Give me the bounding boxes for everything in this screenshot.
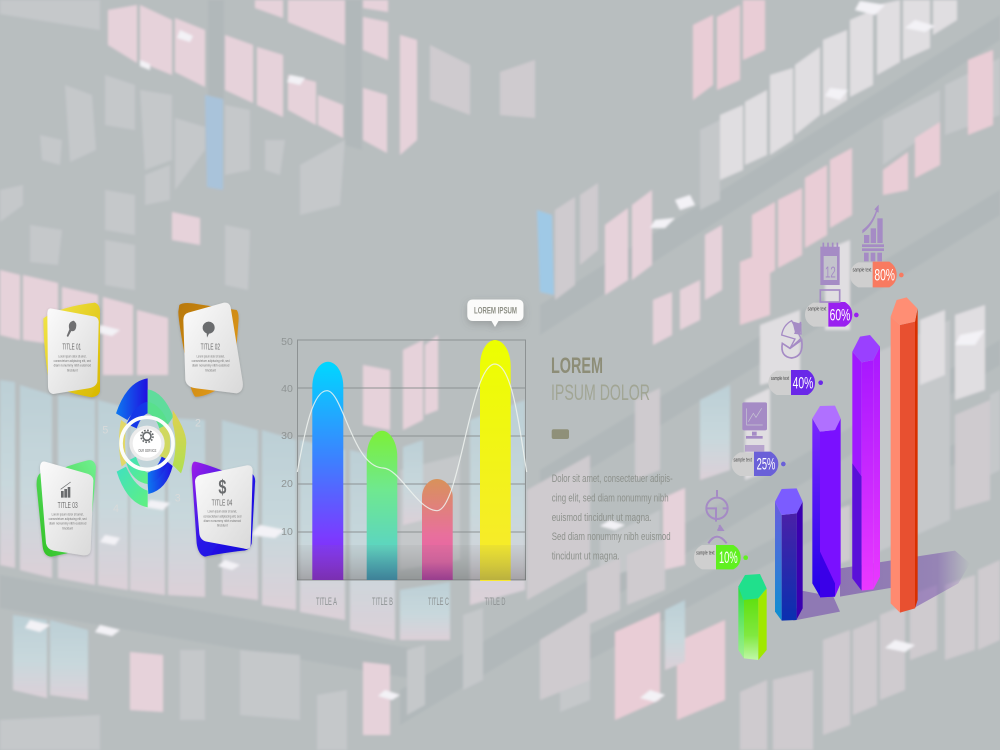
card: title 02: Lorem ipsum dolor sit amet, bbox=[197, 354, 225, 358]
label: 60%: sample text bbox=[808, 307, 827, 313]
icon: calendar bbox=[820, 243, 840, 302]
text block: heading and paragraph bbox=[551, 353, 673, 562]
card: title 01 bbox=[43, 303, 100, 397]
icon: calendar: 12 bbox=[825, 264, 836, 281]
category labels: TITLE D bbox=[484, 596, 506, 608]
platform shadow bbox=[793, 551, 970, 621]
label: 80%: 80% bbox=[874, 265, 895, 284]
card: title 03: tincidunt bbox=[62, 526, 73, 530]
bar: title A bbox=[312, 362, 343, 580]
chart: bar and line chart bbox=[281, 300, 527, 608]
floor shadow bbox=[297, 545, 526, 580]
segment numbers: 5 bbox=[102, 425, 108, 437]
card: title 01: Lorem ipsum dolor sit amet, bbox=[58, 354, 86, 358]
bar: title B bbox=[367, 431, 397, 580]
icon: pie chart bbox=[782, 321, 802, 358]
category labels: TITLE B bbox=[372, 596, 393, 608]
card: title 01: tincidunt bbox=[67, 368, 78, 372]
label: 40%: sample text bbox=[771, 376, 790, 382]
chart: 3D hexagonal bars bbox=[694, 205, 970, 660]
chart grid bbox=[297, 340, 526, 580]
bar: title C bbox=[422, 479, 453, 580]
callout: lorem ipsum bbox=[467, 300, 524, 327]
segment numbers: 4 bbox=[113, 503, 119, 515]
axis labels bbox=[281, 336, 293, 538]
bar: 40 percent bbox=[812, 406, 841, 597]
category labels: TITLE C bbox=[428, 596, 449, 608]
bar: 60 percent bbox=[852, 335, 880, 591]
label: 80%: sample text bbox=[853, 267, 872, 273]
heading bbox=[551, 353, 650, 405]
paragraph: Dolor sit amet, consectetuer adipis- bbox=[552, 473, 673, 485]
category labels bbox=[316, 596, 506, 608]
card: title 03: consectetuer adipiscing elit, sed bbox=[49, 517, 87, 521]
card: title 04 bbox=[192, 462, 255, 557]
card: title 02 bbox=[178, 303, 243, 397]
card: title 03 bbox=[37, 460, 96, 557]
paragraph: euismod tincidunt ut magna. bbox=[552, 512, 652, 524]
card: title 04: Lorem ipsum dolor sit amet, bbox=[208, 510, 237, 514]
bar: 10 percent bbox=[738, 574, 767, 660]
segment numbers: 3 bbox=[175, 492, 181, 504]
icon: clock bbox=[706, 490, 728, 543]
label: 80% bbox=[850, 262, 904, 287]
card: title 03: Lorem ipsum dolor sit amet, bbox=[52, 512, 84, 516]
label: 25% bbox=[732, 452, 786, 476]
card: title 04: tincidunt bbox=[217, 524, 228, 528]
card: title 03: diam nonummy nibh euismod bbox=[49, 522, 86, 526]
card: title 03: TITLE 03 bbox=[58, 500, 78, 510]
card: title 01: consectetuer adipiscing elit, sed bbox=[54, 359, 91, 363]
axis labels: 40 bbox=[281, 383, 293, 395]
label: 60% bbox=[805, 302, 859, 327]
label: 25%: sample text bbox=[733, 457, 752, 463]
label: 10%: sample text bbox=[696, 551, 715, 557]
card: title 04: consectetuer adipiscing elit, sed bbox=[203, 514, 241, 518]
service wheel: OUR SERVICE bbox=[138, 448, 157, 454]
service wheel bbox=[116, 378, 186, 507]
heading: IPSUM DOLOR bbox=[551, 380, 650, 405]
bar: 25 percent bbox=[775, 488, 803, 621]
category labels: TITLE A bbox=[316, 596, 337, 608]
accent bar bbox=[552, 429, 569, 439]
card: title 02: tincidunt bbox=[205, 368, 216, 372]
label: 40%: 40% bbox=[793, 373, 813, 392]
segment numbers bbox=[102, 417, 201, 515]
icon: monitor bbox=[742, 402, 767, 452]
label: 10%: 10% bbox=[719, 548, 738, 567]
callout: lorem ipsum: LOREM IPSUM bbox=[474, 306, 517, 316]
label: 40% bbox=[768, 370, 823, 395]
segment numbers: 2 bbox=[195, 417, 201, 429]
card: title 02: consectetuer adipiscing elit, sed bbox=[192, 359, 230, 363]
axis labels: 30 bbox=[281, 430, 293, 442]
axis labels: 50 bbox=[281, 336, 293, 348]
card: title 01: TITLE 01 bbox=[62, 342, 81, 352]
label: 60%: 60% bbox=[830, 306, 850, 325]
trend line bbox=[297, 364, 527, 511]
axis labels: 10 bbox=[281, 526, 293, 538]
card: title 02: TITLE 02 bbox=[201, 342, 220, 352]
label: 25%: 25% bbox=[757, 455, 775, 474]
paragraph: cing elit, sed diam nonummy nibh bbox=[552, 492, 669, 504]
icon: gear bbox=[141, 430, 153, 442]
card: title 01: diam nonummy nibh euismod bbox=[54, 364, 91, 368]
paragraph: Sed diam nonummy nibh euismod bbox=[552, 531, 671, 543]
card: title 04: diam nonummy nibh euismod bbox=[204, 519, 241, 523]
card: title 02: diam nonummy nibh euismod bbox=[192, 364, 229, 368]
card: title 04: TITLE 04 bbox=[212, 498, 233, 508]
panel: service wheel with four cards bbox=[37, 303, 255, 557]
heading: LOREM bbox=[551, 353, 603, 378]
bar: title D bbox=[480, 340, 511, 581]
icon: growth bars bbox=[862, 205, 884, 261]
label: 10% bbox=[694, 545, 748, 569]
bar: 80 percent bbox=[891, 297, 918, 613]
card: title 04: $ bbox=[218, 476, 227, 499]
paragraph: tincidunt ut magna. bbox=[552, 550, 620, 562]
axis labels: 20 bbox=[281, 478, 293, 490]
